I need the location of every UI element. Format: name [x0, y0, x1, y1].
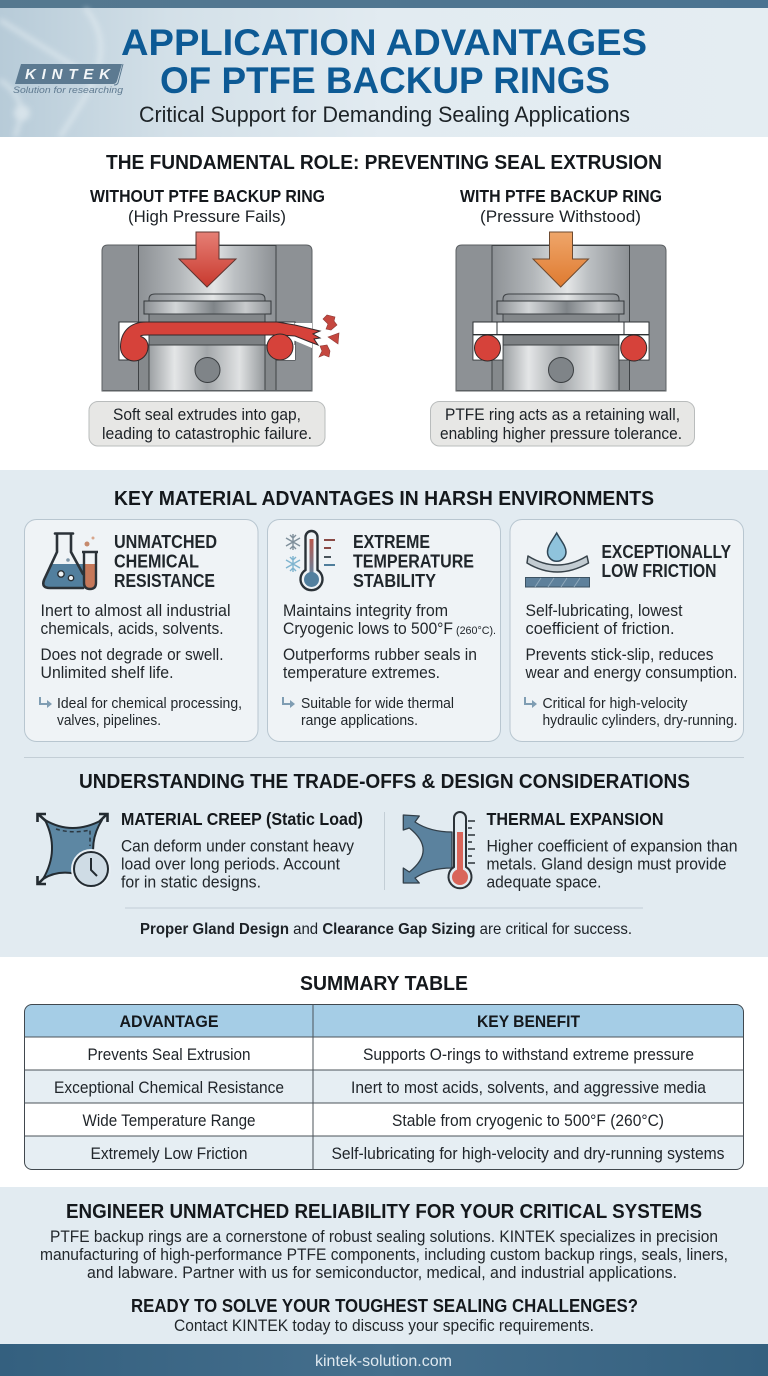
- summary table: Prevents Seal Extrusion: [88, 1046, 250, 1064]
- summary table: [24, 1004, 744, 1170]
- summary table: Exceptional Chemical Resistance: [54, 1079, 284, 1097]
- panel: call to action: [0, 1187, 768, 1344]
- card body: Self-lubricating, lowest: [526, 602, 683, 620]
- card body: coefficient of friction.: [526, 620, 674, 638]
- card body: (260°C).: [456, 625, 496, 637]
- logo: Solution for researching: [13, 85, 124, 96]
- callout: failure: leading to catastrophic failure.: [102, 425, 312, 443]
- subtitle: Critical Support for Demanding Sealing Applications: [139, 102, 630, 127]
- heading: trade-offs: UNDERSTANDING THE TRADE-OFFS & DESIGN CONSIDERATIONS: [79, 770, 690, 793]
- card title: [353, 531, 474, 591]
- card note: Ideal for chemical processing,: [57, 695, 242, 712]
- trade-off: thermal expansion: adequate space.: [486, 874, 602, 892]
- PTFE backup ring: [473, 322, 649, 334]
- card title: RESISTANCE: [114, 570, 215, 591]
- icon: seal fragments: [319, 315, 339, 357]
- paragraph: PTFE backup rings are a cornerstone of robust sealing solutions. KINTEK specializes in precision: [50, 1228, 718, 1246]
- design note: Proper Gland Design and Clearance Gap Sizing are critical for success.: [140, 921, 632, 938]
- icon: flask: [43, 534, 98, 589]
- card: low friction: [510, 520, 744, 742]
- without ring label: [90, 186, 325, 226]
- paragraph: manufacturing of high-performance PTFE components, including custom backup rings, seals, liners,: [40, 1246, 728, 1264]
- diagram: failed seal: [102, 232, 339, 392]
- summary table: Wide Temperature Range: [82, 1112, 256, 1130]
- footer: [0, 1344, 768, 1376]
- card body: Inert to almost all industrial: [40, 602, 230, 620]
- paragraph: [40, 1228, 728, 1282]
- card note: Suitable for wide thermal: [301, 695, 454, 712]
- logo: [13, 64, 124, 96]
- logo: KINTEK: [25, 66, 111, 83]
- paragraph: and labware. Partner with us for semiconductor, medical, and industrial applications.: [87, 1264, 677, 1282]
- title: APPLICATION ADVANTAGES: [121, 22, 647, 63]
- trade-off: material creep: [38, 809, 363, 892]
- summary table: Extremely Low Friction: [90, 1145, 248, 1163]
- card body: Prevents stick-slip, reduces: [526, 646, 714, 664]
- callout: failure: Soft seal extrudes into gap,: [113, 406, 301, 424]
- card note: Critical for high-velocity: [542, 695, 688, 712]
- card body: [525, 602, 738, 682]
- panel: material advantages and trade-offs: [0, 470, 768, 957]
- arrow: pressure: [533, 232, 588, 287]
- card title: [602, 541, 732, 581]
- card body: temperature extremes.: [283, 664, 440, 682]
- card: chemical resistance: [24, 520, 258, 742]
- callout: success: enabling higher pressure tolerance.: [440, 425, 682, 443]
- card title: TEMPERATURE: [353, 550, 474, 572]
- summary table: Stable from cryogenic to 500°F (260°C): [392, 1112, 664, 1130]
- icon: expansion with thermometer: [403, 812, 475, 888]
- icon: droplet on surface: [526, 533, 590, 587]
- callout: failure: [89, 402, 325, 446]
- icon: thermometer: [286, 531, 335, 590]
- card title: STABILITY: [353, 570, 437, 591]
- arrow: pressure: [179, 232, 236, 287]
- extruded seal: [120, 322, 320, 361]
- card note: [39, 695, 242, 729]
- diagram: supported seal: [456, 232, 666, 392]
- summary table: Self-lubricating for high-velocity and dry-running systems: [332, 1145, 724, 1163]
- card: temperature stability: [268, 520, 500, 742]
- card note: hydraulic cylinders, dry-running.: [542, 712, 738, 729]
- trade-off: thermal expansion: Higher coefficient of expansion than: [486, 838, 738, 856]
- card note: range applications.: [301, 712, 418, 729]
- card note: valves, pipelines.: [57, 712, 161, 729]
- card body: chemicals, acids, solvents.: [40, 620, 224, 638]
- callout: success: [430, 402, 694, 446]
- icon: creep sheet with clock: [38, 814, 111, 889]
- title: [121, 22, 647, 101]
- trade-off: material creep: load over long periods. Account: [121, 856, 340, 874]
- broken gap: [293, 323, 312, 348]
- card body: [283, 602, 496, 682]
- heading: SUMMARY TABLE: [300, 972, 468, 995]
- trade-off: material creep: for in static designs.: [121, 874, 261, 892]
- trade-off: material creep: MATERIAL CREEP (Static Load): [121, 809, 363, 829]
- card note: [282, 695, 454, 729]
- piston pin holes: [195, 358, 574, 382]
- trade-off: thermal expansion: [403, 809, 738, 892]
- title: OF PTFE BACKUP RINGS: [160, 60, 610, 101]
- without ring label: (High Pressure Fails): [128, 208, 286, 226]
- summary table: Supports O-rings to withstand extreme pressure: [363, 1046, 694, 1064]
- trade-off: thermal expansion: metals. Gland design must provide: [486, 856, 726, 874]
- summary table: ADVANTAGE: [120, 1012, 218, 1031]
- card title: CHEMICAL: [114, 550, 199, 572]
- call to action: READY TO SOLVE YOUR TOUGHEST SEALING CHALLENGES?: [131, 1296, 638, 1316]
- card body: [40, 602, 230, 682]
- top bar: [0, 0, 768, 8]
- card body: Cryogenic lows to 500°F: [283, 620, 453, 638]
- footer: kintek-solution.com: [315, 1353, 452, 1370]
- card body: Outperforms rubber seals in: [283, 646, 477, 664]
- with ring label: (Pressure Withstood): [480, 208, 641, 226]
- card title: EXTREME: [353, 531, 430, 552]
- without ring label: WITHOUT PTFE BACKUP RING: [90, 186, 325, 206]
- card title: EXCEPTIONALLY: [602, 541, 732, 562]
- with ring label: [460, 186, 662, 226]
- with ring label: WITH PTFE BACKUP RING: [460, 186, 662, 206]
- card title: [114, 531, 217, 591]
- heading: THE FUNDAMENTAL ROLE: PREVENTING SEAL EXTRUSION: [106, 151, 662, 174]
- trade-off: material creep: Can deform under constant heavy: [121, 838, 355, 856]
- call to action: Contact KINTEK today to discuss your specific requirements.: [174, 1317, 594, 1335]
- card body: Maintains integrity from: [283, 602, 448, 620]
- card body: wear and energy consumption.: [525, 664, 738, 682]
- trade-off: thermal expansion: THERMAL EXPANSION: [486, 809, 664, 829]
- heading: KEY MATERIAL ADVANTAGES IN HARSH ENVIRONMENTS: [114, 487, 654, 510]
- callout: success: PTFE ring acts as a retaining wall,: [445, 406, 680, 424]
- summary table: Inert to most acids, solvents, and aggressive media: [351, 1079, 707, 1097]
- panel: fundamental role: [0, 137, 768, 470]
- card title: LOW FRICTION: [602, 560, 716, 581]
- card note: [524, 695, 738, 729]
- card title: UNMATCHED: [114, 531, 217, 552]
- call to action: [131, 1296, 638, 1335]
- heading: ENGINEER UNMATCHED RELIABILITY FOR YOUR CRITICAL SYSTEMS: [66, 1200, 702, 1223]
- header: [0, 8, 768, 137]
- card body: Does not degrade or swell.: [40, 646, 224, 664]
- card body: Unlimited shelf life.: [40, 664, 174, 682]
- summary table: KEY BENEFIT: [477, 1012, 581, 1031]
- panel: summary: [0, 957, 768, 1187]
- o-rings: [474, 335, 647, 361]
